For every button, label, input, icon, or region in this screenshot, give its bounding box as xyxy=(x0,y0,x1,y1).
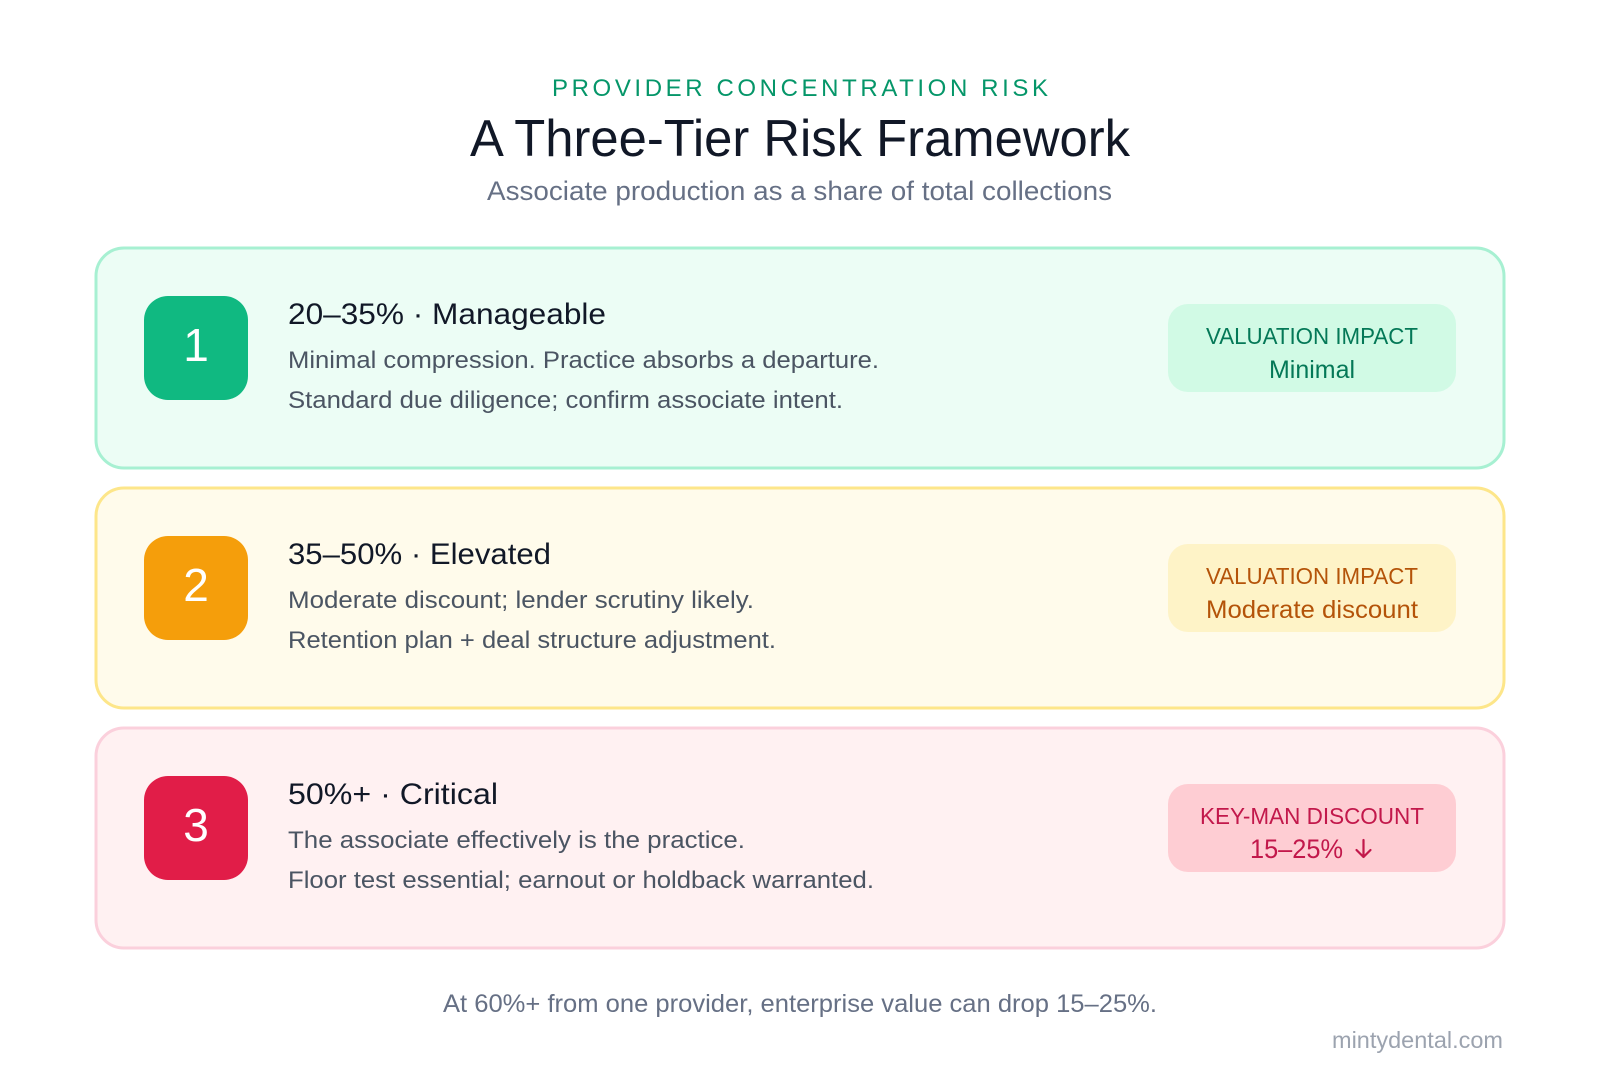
card background xyxy=(96,248,1504,468)
number badge 1 xyxy=(144,296,248,400)
subtitle: Associate production as a share of total collections xyxy=(487,176,1112,206)
tier heading: 35–50% · Elevated xyxy=(288,538,551,571)
valuation impact pill xyxy=(1168,304,1456,392)
number badge 2: 2 xyxy=(183,559,209,611)
description line 2: Retention plan + deal structure adjustment. xyxy=(288,627,776,654)
eyebrow: PROVIDER CONCENTRATION RISK xyxy=(552,75,1048,102)
card background xyxy=(96,488,1504,708)
key-man discount pill: KEY-MAN DISCOUNT xyxy=(1200,803,1424,829)
source credit: mintydental.com xyxy=(1332,1027,1503,1053)
tier heading: 50%+ · Critical xyxy=(288,778,498,811)
footnote: At 60%+ from one provider, enterprise value can drop 15–25%. xyxy=(443,990,1157,1018)
valuation impact pill: Minimal xyxy=(1269,356,1355,384)
key-man discount pill xyxy=(1168,784,1456,872)
key-man discount pill: 15–25% xyxy=(1250,834,1343,864)
tier heading: 20–35% · Manageable xyxy=(288,298,606,331)
number badge 1: 1 xyxy=(183,319,209,371)
title: A Three-Tier Risk Framework xyxy=(470,110,1131,168)
card background xyxy=(96,728,1504,948)
valuation impact pill: Moderate discount xyxy=(1206,596,1418,624)
valuation impact pill xyxy=(1168,544,1456,632)
icon: down arrow xyxy=(1356,840,1370,857)
description line 2: Standard due diligence; confirm associate intent. xyxy=(288,387,843,414)
valuation impact pill: VALUATION IMPACT xyxy=(1206,323,1418,349)
description line 1: Minimal compression. Practice absorbs a departure. xyxy=(288,347,879,374)
description line 2: Floor test essential; earnout or holdback warranted. xyxy=(288,867,874,894)
number badge 3: 3 xyxy=(183,799,209,851)
description line 1: The associate effectively is the practice. xyxy=(288,827,745,854)
number badge 3 xyxy=(144,776,248,880)
panel: tier 3 critical xyxy=(96,728,1504,948)
number badge 2 xyxy=(144,536,248,640)
panel: tier 1 manageable xyxy=(96,248,1504,468)
description line 1: Moderate discount; lender scrutiny likely. xyxy=(288,587,754,614)
valuation impact pill: VALUATION IMPACT xyxy=(1206,563,1418,589)
panel: tier 2 elevated xyxy=(96,488,1504,708)
header xyxy=(470,75,1131,206)
